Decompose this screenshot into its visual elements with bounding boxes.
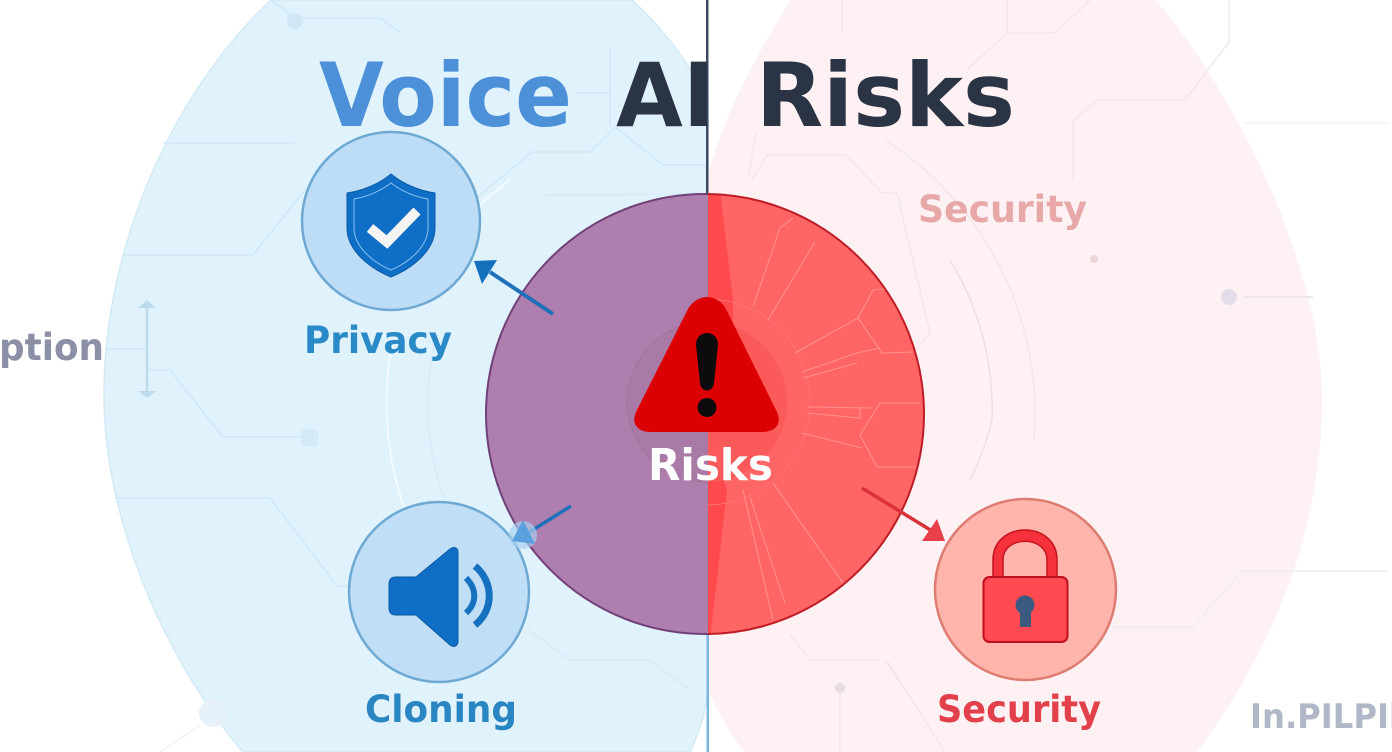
privacy circle bbox=[302, 132, 480, 310]
title: Voice bbox=[319, 44, 572, 147]
icon: speaker bbox=[389, 548, 489, 646]
privacy label: Privacy bbox=[304, 319, 452, 362]
icon: padlock bbox=[984, 530, 1068, 642]
disc: purple left half bbox=[487, 195, 708, 633]
icon: warning triangle bbox=[634, 297, 779, 432]
icon: shield with check bbox=[347, 174, 435, 277]
title bbox=[319, 44, 1015, 147]
disc: bright centre wedge bbox=[708, 190, 733, 640]
security label: Security bbox=[937, 688, 1101, 731]
panel: red security half background bbox=[708, 0, 1322, 752]
disc: inner rings bbox=[708, 299, 810, 506]
arrow: to cloning bbox=[509, 506, 571, 549]
arrow: to privacy bbox=[474, 260, 553, 314]
center divider line: bottom bbox=[706, 632, 709, 752]
faded label: clipped left text: ption bbox=[0, 326, 104, 369]
center divider line: top bbox=[706, 0, 708, 196]
cloning label: Cloning bbox=[365, 688, 517, 731]
panel: security node bbox=[935, 499, 1116, 731]
panel: privacy node bbox=[302, 132, 480, 362]
panel: blue privacy half background bbox=[104, 0, 708, 752]
disc: white circuit traces bbox=[743, 218, 920, 620]
title: Risks bbox=[756, 44, 1015, 147]
panel: cloning node bbox=[349, 502, 529, 731]
faded label: Security: Security bbox=[918, 188, 1087, 231]
center label: Risks: Risks bbox=[648, 440, 773, 491]
arrow: to security bbox=[862, 488, 945, 541]
title: AI bbox=[616, 44, 715, 147]
background circuit traces: red side bbox=[748, 0, 1389, 752]
central risks disc bbox=[486, 190, 924, 640]
cloning circle bbox=[349, 502, 529, 682]
background circuit traces: blue side bbox=[105, 0, 705, 752]
disc: red right half bbox=[710, 196, 923, 633]
disc: purple outline bbox=[485, 193, 708, 635]
security circle bbox=[935, 499, 1116, 680]
disc: left inner ring bbox=[627, 322, 707, 482]
disc: red outline bbox=[708, 193, 925, 635]
